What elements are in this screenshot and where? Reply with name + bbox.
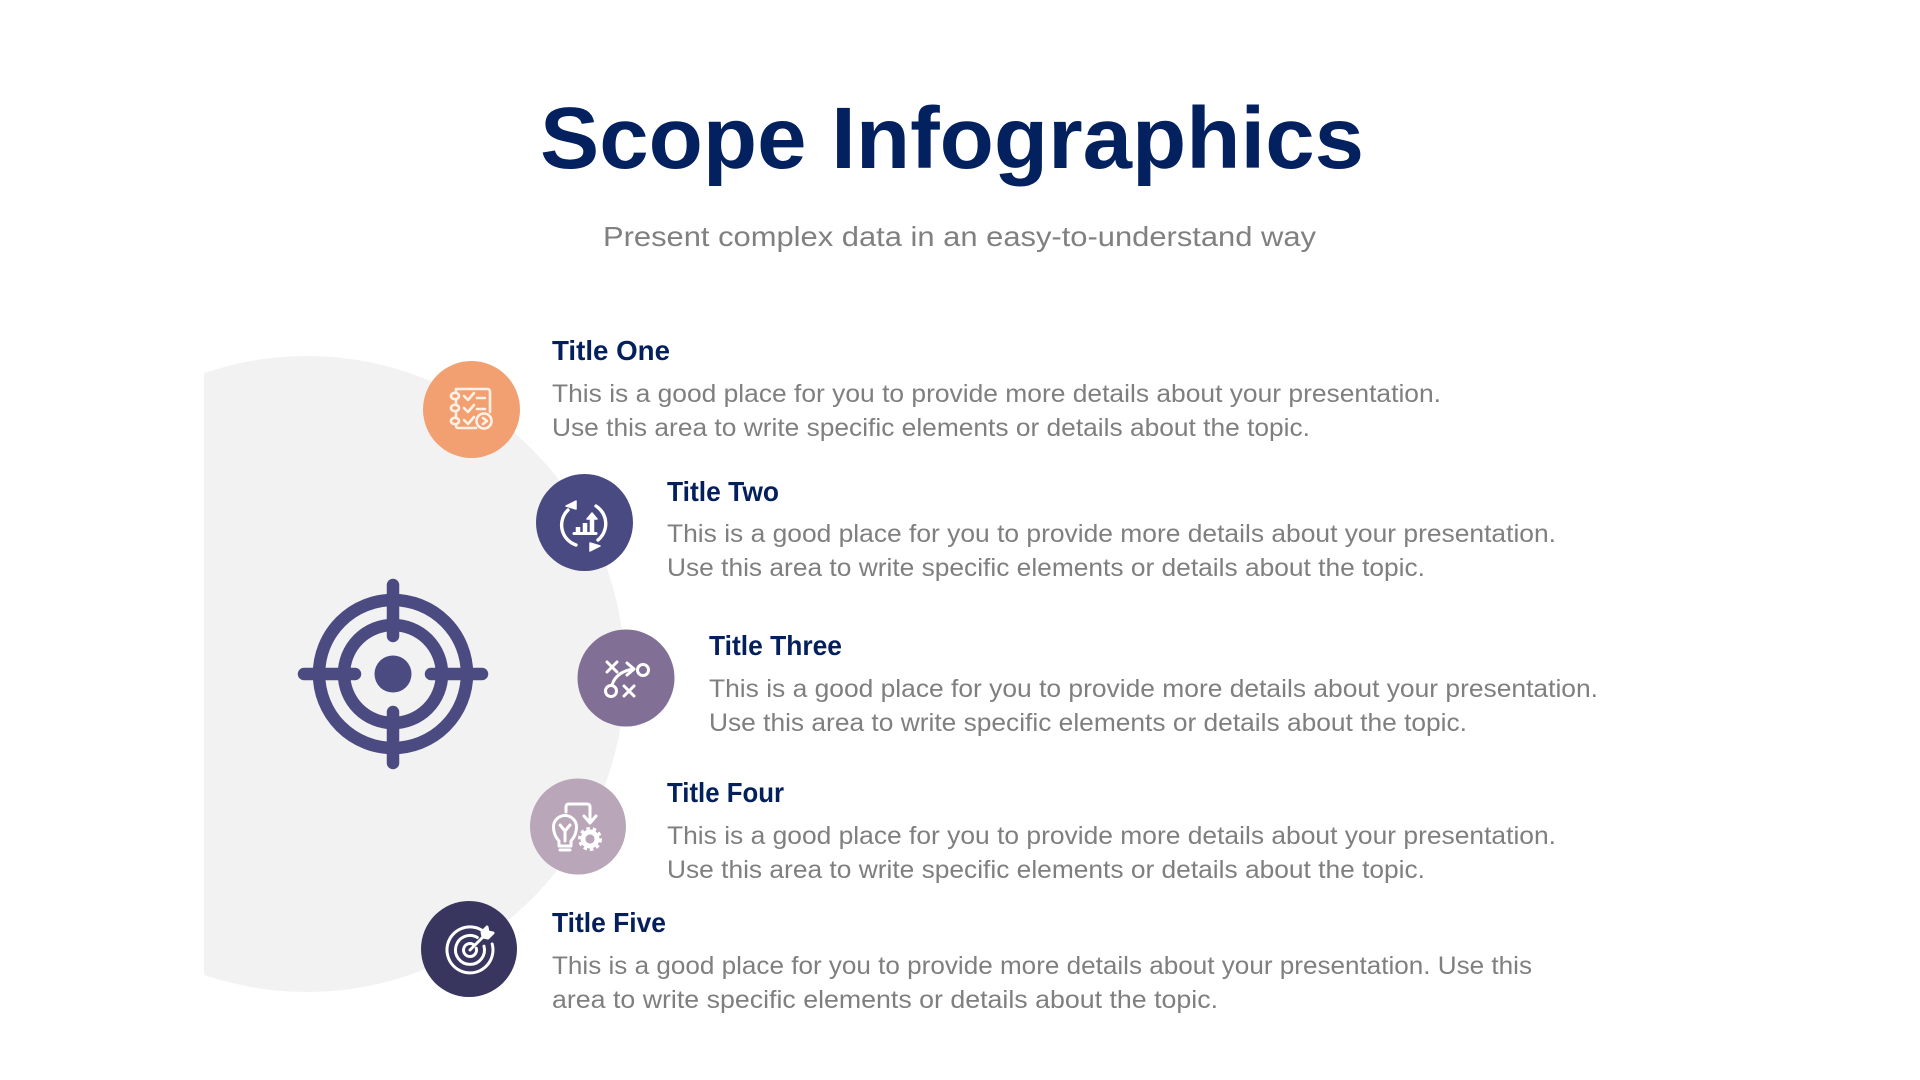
title: Scope Infographics	[540, 90, 1364, 187]
item three	[578, 630, 1598, 737]
heading: title five: Title Five	[552, 907, 666, 938]
text: description five: This is a good place for you to provide more details about your presentation. Use this	[552, 952, 1532, 980]
subtitle: Present complex data in an easy-to-understand way	[603, 221, 1316, 252]
heading: title three: Title Three	[709, 630, 842, 661]
text: description three	[709, 675, 1598, 737]
text: description one: Use this area to write specific elements or details about the topic.	[552, 414, 1310, 442]
heading: title four: Title Four	[667, 777, 784, 808]
heading: title one: Title One	[552, 335, 670, 366]
heading: title two: Title Two	[667, 476, 779, 507]
item four	[530, 777, 1556, 884]
text: description five: area to write specific elements or details about the topic.	[552, 986, 1218, 1014]
text: description five	[552, 952, 1532, 1014]
text: description two: This is a good place for you to provide more details about your presentation.	[667, 520, 1556, 548]
text: description three: This is a good place for you to provide more details about your presentation.	[709, 675, 1598, 703]
icon: cycle with bar chart on indigo circle	[536, 474, 633, 571]
text: description one	[552, 380, 1441, 442]
icon: checklist on orange circle	[423, 361, 520, 458]
icon: central crosshair target	[304, 585, 482, 763]
background half circle	[204, 356, 622, 992]
item five	[421, 901, 1532, 1014]
item two	[536, 474, 1556, 582]
text: description four	[667, 822, 1556, 884]
text: description four: Use this area to write specific elements or details about the topic.	[667, 856, 1425, 884]
text: description one: This is a good place for you to provide more details about your presentation.	[552, 380, 1441, 408]
icon: bullseye with arrow on dark circle	[421, 901, 517, 997]
text: description two	[667, 520, 1556, 582]
text: description four: This is a good place for you to provide more details about your presentation.	[667, 822, 1556, 850]
item one	[423, 335, 1441, 458]
icon: bulb to gear on mauve circle	[530, 778, 626, 874]
icon: strategy play on purple circle	[578, 630, 674, 726]
text: description two: Use this area to write specific elements or details about the topic.	[667, 554, 1425, 582]
text: description three: Use this area to write specific elements or details about the topic.	[709, 709, 1467, 737]
